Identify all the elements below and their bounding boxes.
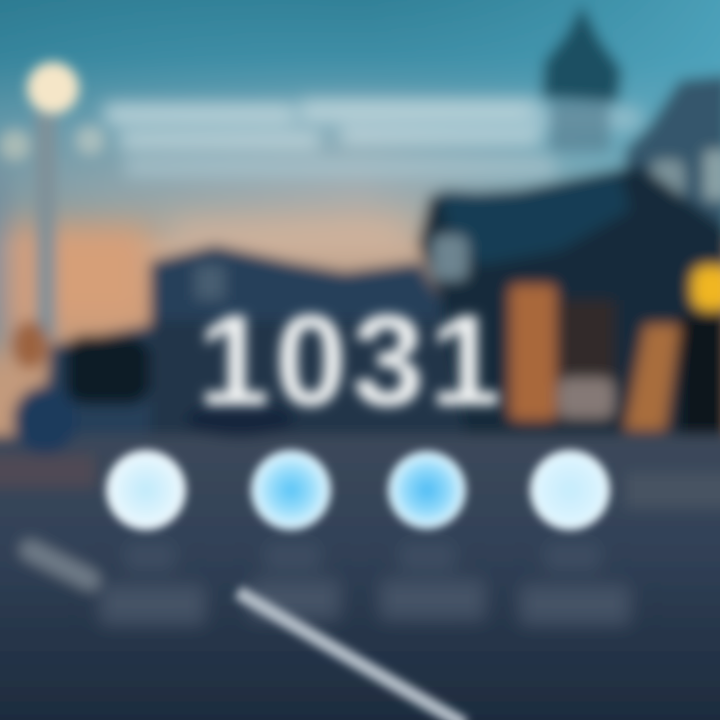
big number: 1031	[197, 287, 507, 433]
tower	[542, 5, 622, 152]
road marking: left dash	[30, 550, 90, 580]
road marking: centre line	[238, 592, 465, 720]
circle 3	[388, 451, 466, 529]
foreground cars	[13, 386, 295, 454]
circle 1	[106, 450, 186, 530]
lamp glow	[27, 62, 79, 114]
main building	[418, 165, 720, 460]
sky background	[0, 0, 720, 460]
circle 2	[251, 450, 331, 530]
clouds	[105, 100, 640, 176]
upper right building	[625, 75, 720, 260]
street lamp	[0, 110, 104, 369]
feature captions	[100, 545, 630, 625]
circle 4	[530, 450, 610, 530]
road	[0, 435, 720, 720]
distant building silhouette	[40, 245, 520, 450]
horizon glow	[0, 170, 410, 350]
lit windows	[510, 266, 720, 445]
feature circles	[106, 450, 610, 530]
